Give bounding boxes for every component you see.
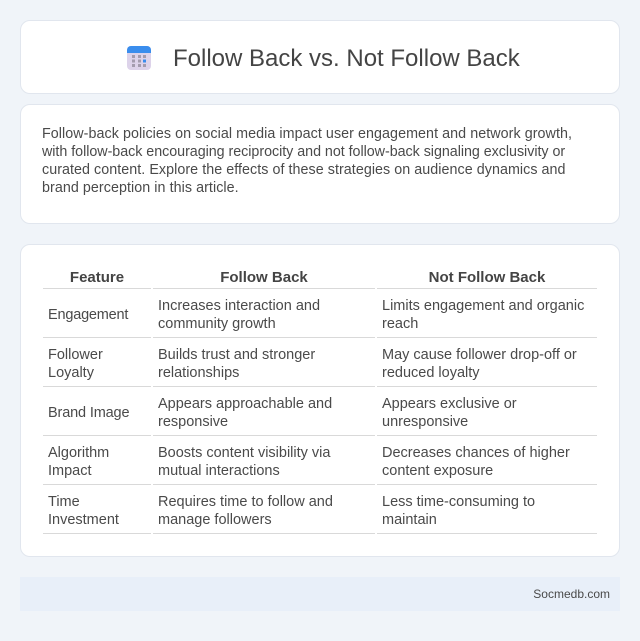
Algorithm Impact follow back xyxy=(158,445,330,479)
Engagement follow back xyxy=(158,298,320,332)
Brand Image not follow back: Appears exclusive or xyxy=(382,396,517,412)
intro text xyxy=(42,126,572,196)
Follower Loyalty not follow back xyxy=(382,347,577,381)
footer credit: Socmedb.com xyxy=(533,587,610,601)
Algorithm Impact follow back: mutual interactions xyxy=(158,463,280,479)
footer xyxy=(20,577,620,611)
Time Investment not follow back xyxy=(382,494,535,528)
row: Algorithm Impact: Impact xyxy=(48,463,92,479)
Follower Loyalty follow back: relationships xyxy=(158,365,239,381)
Time Investment not follow back: maintain xyxy=(382,512,437,528)
Follower Loyalty follow back xyxy=(158,347,315,381)
icon: calendar xyxy=(127,46,151,70)
table header: Not Follow Back: Not Follow Back xyxy=(429,269,545,286)
Engagement not follow back xyxy=(382,298,584,332)
Engagement follow back: Increases interaction and xyxy=(158,298,320,314)
Engagement follow back: community growth xyxy=(158,316,276,332)
table header: Feature: Feature xyxy=(70,269,124,286)
row: Time Investment: Time xyxy=(48,494,80,510)
Brand Image follow back xyxy=(158,396,332,430)
Algorithm Impact follow back: Boosts content visibility via xyxy=(158,445,330,461)
title: Follow Back vs. Not Follow Back xyxy=(173,45,520,72)
row: Follower Loyalty: Loyalty xyxy=(48,365,94,381)
row: Algorithm Impact xyxy=(48,445,109,479)
Follower Loyalty not follow back: reduced loyalty xyxy=(382,365,480,381)
row: Engagement: Engagement xyxy=(48,307,128,323)
Time Investment follow back xyxy=(158,494,333,528)
Engagement not follow back: Limits engagement and organic xyxy=(382,298,584,314)
row: Follower Loyalty: Follower xyxy=(48,347,103,363)
row: Time Investment: Investment xyxy=(48,512,119,528)
panel: comparison table xyxy=(20,244,620,557)
row: Follower Loyalty xyxy=(48,347,103,381)
row: Brand Image: Brand Image xyxy=(48,405,129,421)
panel: introduction xyxy=(20,104,620,224)
Algorithm Impact not follow back xyxy=(382,445,570,479)
intro text: with follow-back encouraging reciprocity and not follow-back signaling exclusivity or xyxy=(42,144,565,160)
Time Investment not follow back: Less time-consuming to xyxy=(382,494,535,510)
Engagement not follow back: reach xyxy=(382,316,418,332)
intro text: Follow-back policies on social media impact user engagement and network growth, xyxy=(42,126,572,142)
Follower Loyalty follow back: Builds trust and stronger xyxy=(158,347,315,363)
intro text: brand perception in this article. xyxy=(42,180,239,196)
Algorithm Impact not follow back: Decreases chances of higher xyxy=(382,445,570,461)
Follower Loyalty not follow back: May cause follower drop-off or xyxy=(382,347,577,363)
Brand Image not follow back xyxy=(382,396,517,430)
row: Algorithm Impact: Algorithm xyxy=(48,445,109,461)
table header: Follow Back: Follow Back xyxy=(220,269,308,286)
Brand Image follow back: responsive xyxy=(158,414,228,430)
Brand Image follow back: Appears approachable and xyxy=(158,396,332,412)
Time Investment follow back: manage followers xyxy=(158,512,272,528)
intro text: curated content. Explore the effects of these strategies on audience dynamics and xyxy=(42,162,566,178)
row: Time Investment xyxy=(48,494,119,528)
Time Investment follow back: Requires time to follow and xyxy=(158,494,333,510)
panel: header xyxy=(20,20,620,94)
Brand Image not follow back: unresponsive xyxy=(382,414,468,430)
Algorithm Impact not follow back: content exposure xyxy=(382,463,493,479)
